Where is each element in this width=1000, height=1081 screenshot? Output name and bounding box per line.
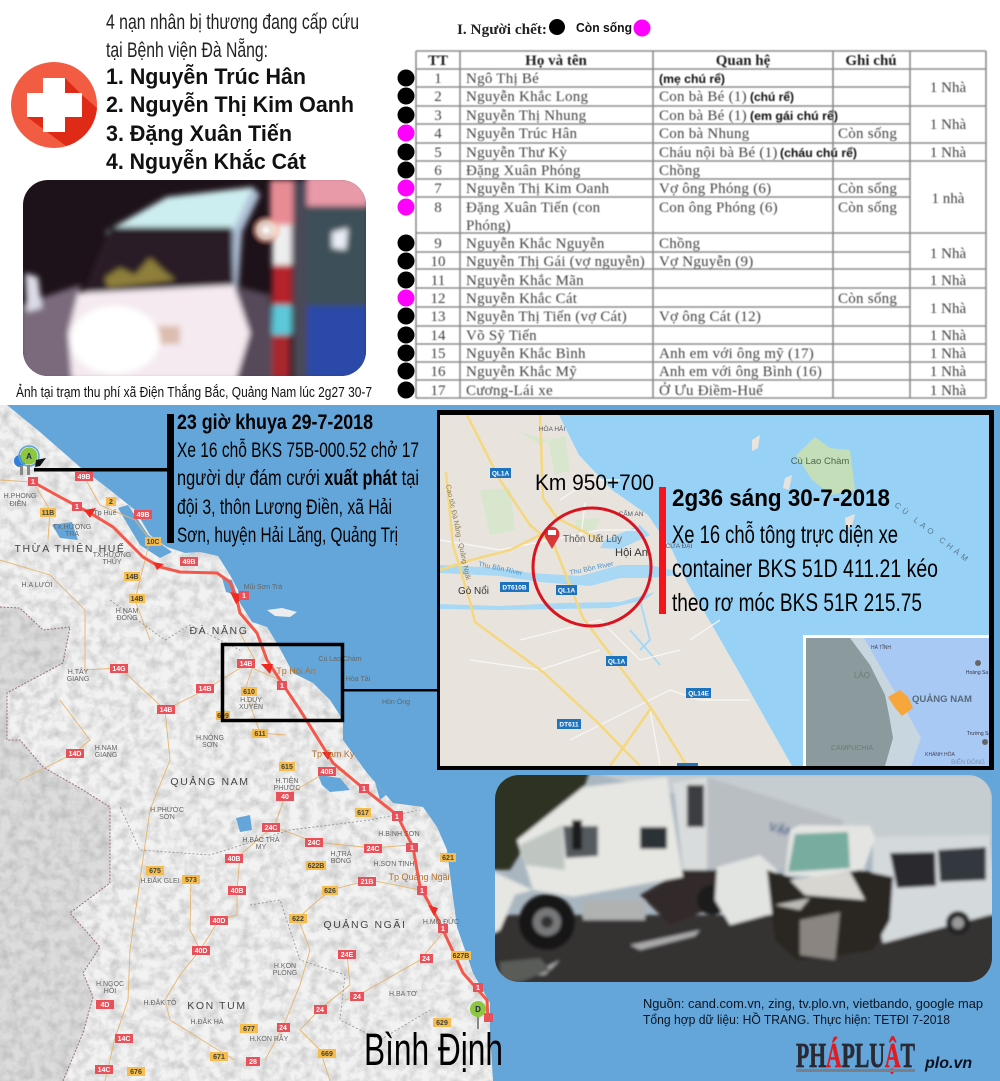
table: victims list: 11 (431, 273, 445, 289)
district labels: H.ĐĂK GLEI (140, 876, 180, 885)
legend: dead and alive (457, 19, 650, 38)
table: victims list: Nguyễn Thị Gái (vợ nguyễn) (466, 254, 645, 270)
route shield labels yellow: 573 (185, 877, 197, 884)
table: victims list: 1 Nhà (930, 273, 966, 289)
route shield labels red: 40D (195, 948, 207, 955)
table: victims list: 15 (430, 346, 446, 362)
route shield labels red: 1 (362, 786, 366, 793)
route shield labels red: 40B (231, 888, 243, 895)
table: victims list: Nguyễn Khắc Nguyễn (466, 236, 605, 252)
callout: departure (167, 411, 419, 547)
table: victims list: 7 (434, 181, 442, 197)
route shield labels red: 40 (281, 794, 289, 801)
district labels: Tp Tam Kỳ (312, 749, 355, 759)
callout: crash: 2g36 sáng 30-7-2018 (672, 485, 890, 512)
inset white roads (440, 480, 750, 765)
route shield labels red: 4D (101, 1002, 109, 1009)
route shield labels yellow: 610 (243, 689, 255, 696)
inset road shields: DT611 (559, 722, 579, 728)
caption: toll station photo: Ảnh tại trạm thu phí xã Điện Thắng Bắc, Quảng Nam lúc 2g27 30-7 (16, 384, 372, 401)
route shield labels yellow: 2 (109, 499, 113, 506)
district labels: HỒI (104, 985, 116, 995)
route shield labels yellow: 676 (130, 1069, 142, 1076)
route shield labels red: 24C (308, 840, 320, 847)
inset road shields: QL1A (492, 470, 509, 478)
route shield labels yellow: 675 (149, 868, 161, 875)
district labels: H.BÌNH SƠN (378, 829, 420, 838)
table: victims list: TT (428, 53, 448, 69)
inset place labels: Hội An (615, 547, 648, 559)
table: victims list: 1 Nhà (930, 328, 966, 344)
table: victims list: 5 (434, 145, 442, 161)
label: Binh Dinh: Bình Định (364, 1024, 503, 1075)
table: victims list: Vợ ông Cát (12) (659, 309, 761, 325)
table: victims list: Anh em với ông mỹ (17) (659, 346, 814, 362)
district labels: H.TIÊN (276, 776, 298, 785)
table: victims list: 13 (430, 309, 446, 325)
mini locator map: Hoàng Sa (966, 670, 988, 676)
inset place labels: Thu Bồn River (478, 559, 524, 577)
district labels: Cù Lao Chàm (318, 656, 362, 663)
logo: plo.vn: plo.vn (924, 1055, 972, 1072)
table: victims list: Chồng (659, 236, 701, 252)
icon: red cross (11, 62, 97, 148)
table: victims list: 1 (434, 71, 442, 87)
heading: injured victims: tại Bệnh viện Đà Nẵng: (106, 39, 268, 62)
table: victims list: 1 nhà (932, 191, 965, 207)
route shield labels red: 24 (353, 994, 361, 1001)
callout: departure: người dự đám cưới xuất phát tại (177, 467, 419, 490)
marker A: departure (14, 446, 46, 475)
photo: van at toll station (20, 176, 369, 380)
district labels: H.DUY (240, 697, 262, 704)
mini locator map: LÀO (854, 671, 870, 680)
district labels: H.A LƯỚI (21, 580, 53, 589)
route shield labels yellow: 14B (131, 596, 143, 603)
source credits: Nguồn: cand.com.vn, zing, tv.plo.vn, vietbando, google map (643, 996, 983, 1011)
route shield labels yellow: 671 (213, 1054, 225, 1061)
route shield labels yellow (42, 499, 469, 1076)
table: victims list: Nguyễn Thư Kỳ (466, 145, 567, 161)
table: victims list: 6 (434, 163, 442, 179)
table: victims list: Vợ Nguyễn (9) (659, 254, 754, 270)
route shield labels yellow: 629 (436, 1020, 448, 1027)
table: victims list: 16 (430, 364, 446, 380)
table: victims list: 1 Nhà (930, 145, 966, 161)
district labels: Hòn Ông (382, 697, 410, 706)
mini locator map: HÀ TĨNH (871, 644, 891, 651)
legend: dead and alive: Còn sống (576, 20, 632, 35)
district labels: H.NAM (116, 608, 138, 615)
table: victims list: Con ông Phóng (6) (659, 200, 778, 216)
inset map: crash site (437, 410, 994, 770)
route shield labels yellow: 10C (147, 539, 159, 546)
district labels: H.TÂY (68, 667, 89, 676)
inset place labels: CỬA ĐẠI (666, 541, 693, 550)
callout: crash: theo rơ móc BKS 51R 215.75 (672, 589, 922, 617)
table: victims list: Đặng Xuân Phóng (466, 163, 581, 179)
table: victims list: Vợ ông Phóng (6) (659, 181, 771, 197)
list of injured names: 4. Nguyễn Khắc Cát (106, 149, 306, 174)
route shield labels red: 1 (441, 926, 445, 933)
district labels: GIANG (95, 752, 117, 759)
district labels: H.KON RẪY (250, 1034, 289, 1043)
table: victims list: 2 (434, 89, 442, 105)
inset land (440, 415, 792, 766)
table: victims list: Nguyễn Khắc Cát (466, 291, 578, 307)
inset road shields: QL1A (558, 588, 575, 594)
district labels (4, 493, 459, 1043)
route shield labels red: 1 (395, 814, 399, 821)
cape and islands (267, 608, 297, 617)
mini locator map: Trường Sa (967, 731, 991, 737)
map: central Vietnam route (0, 405, 500, 1081)
water: lagoons and lakes (52, 505, 392, 832)
table: victims list: Nguyễn Khắc Mỹ (466, 364, 577, 380)
table: victims list: Còn sống (838, 126, 897, 142)
route shield labels red: 40B (321, 769, 333, 776)
table: victims list: Nguyễn Thị Tiến (vợ Cát) (466, 309, 627, 325)
table: victims list: Con bà Bé (1) (659, 89, 747, 105)
inset place labels: Cao tốc Đà Nẵng - Quảng Ngãi (444, 484, 473, 581)
route shield labels red: 24 (422, 956, 430, 963)
table: victims list: Đặng Xuân Tiến (con (466, 200, 601, 216)
inset place labels: Cù Lao Chàm (791, 456, 849, 467)
route shield labels red: 40D (213, 918, 225, 925)
district labels: Hòa Tài (346, 676, 371, 683)
district labels: H.NAM (95, 745, 117, 752)
table: victims list: 17 (430, 383, 446, 399)
district labels: H.ĐĂK HÀ (190, 1017, 224, 1026)
table: victims list: (em gái chú rể) (750, 111, 838, 123)
route shield labels yellow: 14B (126, 574, 138, 581)
district labels: H.MỘ ĐỨC (423, 917, 459, 926)
route shield labels red: 1 (75, 504, 79, 511)
table: victims list: 12 (430, 291, 446, 307)
locator box on map (222, 644, 342, 720)
callout: crash (659, 485, 938, 617)
route shield labels yellow: 627B (453, 953, 469, 960)
table: victims list: 4 (434, 126, 442, 142)
table: victims list: Nguyễn Khắc Bình (466, 346, 586, 362)
route shield labels yellow: 611 (254, 731, 266, 738)
route shield labels red: 28 (249, 1059, 257, 1066)
inset place labels: Thôn Uất Lũy (563, 533, 623, 545)
route shield labels red: 24C (265, 825, 277, 832)
table: victims list: 1 Nhà (930, 246, 966, 262)
table: victims list: Ghi chú (845, 53, 897, 69)
route shield labels yellow: 621 (442, 855, 454, 862)
district labels: BỒNG (331, 855, 351, 865)
mini locator map: CAMPUCHIA (831, 745, 873, 752)
route shield labels red: 49B (137, 512, 149, 519)
table: victims list: 9 (434, 236, 442, 252)
inset road shields (490, 468, 711, 768)
province labels: QUẢNG NAM (170, 775, 250, 788)
table: victims list: Nguyễn Trúc Hân (466, 126, 577, 142)
district labels: ĐÔNG (116, 613, 138, 622)
label: Km 950+700: Km 950+700 (535, 470, 654, 495)
district labels: Tp Quảng Ngãi (388, 872, 450, 882)
islands (796, 437, 855, 495)
route shield labels yellow: 617 (357, 810, 369, 817)
table: victims list: 14 (430, 328, 446, 344)
province labels: KON TUM (187, 1000, 247, 1012)
table: victims list: Con bà Nhung (659, 126, 750, 142)
route shields yellow (40, 497, 471, 1076)
route shield labels red: 40B (228, 856, 240, 863)
route shield labels yellow: 609 (217, 713, 229, 720)
table: victims list: Nguyễn Thị Nhung (466, 108, 587, 124)
province labels: ĐÀ NẴNG (189, 624, 249, 637)
district labels: ĐIỀN (10, 498, 26, 508)
table: victims list: Chồng (659, 163, 701, 179)
callout: departure: 23 giờ khuya 29-7-2018 (177, 411, 373, 434)
inset place labels: Gò Nổi (458, 585, 489, 597)
table: victims list: Còn sống (838, 291, 897, 307)
list of injured names: 2. Nguyễn Thị Kim Oanh (106, 92, 354, 117)
table: victims list: Cương-Lái xe (466, 383, 553, 399)
table: victims list: 1 Nhà (930, 117, 966, 133)
inset place labels: CẨM AN (619, 509, 644, 518)
route shield labels red: 49B (78, 474, 90, 481)
district labels: H.KON (274, 963, 296, 970)
heading: injured victims (106, 11, 359, 174)
district labels: H.ĐĂK TÔ (144, 998, 177, 1007)
mini locator map (803, 635, 991, 766)
table: victims list: 1 Nhà (930, 346, 966, 362)
inset road shields: QL14E (688, 690, 709, 698)
marker B: crash destination: D (475, 1005, 481, 1014)
route shield labels red: 14B (160, 707, 172, 714)
route shield labels red: 1 (476, 985, 480, 992)
borders (0, 607, 110, 1081)
legend: dead and alive: I. Người chết: (457, 22, 547, 38)
heading: injured victims: 4 nạn nhân bị thương đang cấp cứu (106, 11, 359, 34)
route shield labels yellow: 615 (281, 764, 293, 771)
district labels: PHƯỚC (274, 783, 300, 792)
route shield labels red: 24 (279, 1025, 287, 1032)
district labels: H.SƠN TỊNH (374, 861, 414, 868)
district labels: SƠN (159, 814, 175, 821)
connector: locator box to inset (344, 689, 438, 692)
route shield labels red: 1 (280, 683, 284, 690)
table: victims list: 8 (434, 200, 442, 216)
route shield labels yellow: 11B (42, 510, 54, 517)
table: victims list: 1 Nhà (930, 364, 966, 380)
route shield labels red: 1 (242, 593, 246, 600)
route shield labels red: 24C (367, 846, 379, 853)
table: victims list: Còn sống (838, 200, 897, 216)
logo: Phap Luat: PHÁPLUẬT (796, 1035, 915, 1075)
roads (0, 478, 445, 1081)
district labels: H.NGỌC (96, 981, 124, 988)
status dots beside table (398, 70, 414, 398)
route shield labels red: 24 (316, 1007, 324, 1014)
callout: departure: Sơn, huyện Hải Lăng, Quảng Trị (177, 524, 398, 547)
table: victims list: Con bà Bé (1) (659, 108, 747, 124)
route shield labels red: 14G (112, 666, 126, 673)
inset place labels: CÙ LAO CHÀM (893, 500, 972, 565)
connector: departure marker to callout (34, 468, 168, 472)
table: victims list: Anh em với ông Bình (16) (659, 364, 822, 380)
district labels: TX.HƯƠNG (53, 524, 91, 531)
district labels: H.BA TƠ (389, 991, 417, 998)
table: victims list: Nguyễn Thị Kim Oanh (466, 181, 609, 197)
table: victims list: 1 Nhà (930, 80, 966, 96)
district labels: XUYÊN (239, 702, 263, 711)
district labels: H.PHƯỚC (150, 805, 184, 814)
district labels: Tp Huế (94, 508, 117, 517)
district labels: H.PHONG (4, 493, 36, 500)
route shield labels red: 1 (410, 845, 414, 852)
route shields red (28, 472, 493, 1074)
district labels: PLÔNG (273, 968, 297, 977)
list of injured names: 1. Nguyễn Trúc Hân (106, 64, 306, 89)
district labels: SƠN (202, 742, 218, 749)
marker B: crash destination (470, 1001, 486, 1029)
main route: red line (33, 482, 488, 1020)
province labels (14, 542, 407, 1012)
route shield labels red: 14B (240, 661, 252, 668)
land base (0, 405, 500, 1081)
route shield labels yellow: 622 (292, 916, 304, 923)
table: victims list: Cháu nội bà Bé (1) (659, 145, 778, 161)
mini locator map: KHÁNH HÒA (925, 751, 956, 758)
table: victims list: 1 Nhà (930, 301, 966, 317)
district labels: Mũi Sơn Trà (244, 584, 282, 591)
district labels: H.TRÀ (330, 849, 352, 858)
district labels: TX.HƯƠNG (93, 552, 131, 559)
callout: departure: Xe 16 chỗ BKS 75B-000.52 chở 17 (177, 439, 419, 462)
district labels: H.NÔNG (196, 733, 224, 742)
province labels: QUẢNG NGÃI (323, 918, 407, 931)
table: victims list (416, 51, 986, 399)
route shield labels red: 14B (199, 686, 211, 693)
mini locator map: BIỂN ĐÔNG (951, 759, 985, 766)
source credits: Tổng hợp dữ liệu: HỒ TRANG. Thực hiện: TETĐI 7-2018 (643, 1012, 950, 1027)
sea background panel (0, 405, 1000, 1081)
route shield labels red: 21B (361, 879, 373, 886)
inset road shields: QL1A (608, 658, 625, 666)
route shield labels red (31, 474, 480, 1074)
mini locator map: QUẢNG NAM (912, 693, 972, 705)
inset place labels: HÒA HẢI (539, 424, 565, 433)
table: victims list: (chú rể) (750, 92, 794, 104)
table: victims list: (mẹ chú rể) (659, 74, 725, 86)
table: victims list: Họ và tên (525, 53, 587, 69)
route shield labels red: 14D (69, 751, 81, 758)
route shield labels yellow: 622B (308, 863, 324, 870)
table: victims list: Nguyễn Khắc Long (466, 89, 589, 105)
photo: wrecked truck and van (490, 770, 997, 987)
route shield labels red: 14C (98, 1067, 110, 1074)
photo: wrecked truck and van: VẬN TẢI HOA (767, 818, 847, 854)
table: victims list: Quan hệ (716, 53, 771, 69)
district labels: TRÀ (65, 529, 79, 538)
route shield labels yellow: 669 (321, 1051, 333, 1058)
district labels: Tp Hội An (276, 666, 316, 676)
table: victims list: Võ Sỹ Tiến (466, 328, 537, 344)
inset place labels: Thu Bồn River (569, 559, 615, 577)
source credits (643, 996, 983, 1027)
table: victims list: Ở Ưu Điềm-Huế (659, 382, 763, 399)
route shield labels red: 49B (183, 559, 195, 566)
table: victims list: Ngô Thị Bé (466, 71, 539, 87)
callout: departure: đội 3, thôn Lương Điền, xã Hải (177, 496, 392, 519)
table: victims list: Nguyễn Khắc Mãn (466, 273, 584, 289)
table: victims list: 10 (430, 254, 446, 270)
district labels: H.BẮC TRÀ (242, 835, 280, 844)
route shield labels red: 1 (420, 888, 424, 895)
district labels: THỦY (102, 557, 122, 566)
table: victims list: Còn sống (838, 181, 897, 197)
route shield labels yellow: 677 (243, 1026, 255, 1033)
red circle: crash area (533, 508, 651, 626)
inset rivers (440, 525, 680, 610)
inset yellow highways (440, 415, 687, 766)
inset place labels (444, 424, 972, 597)
list of injured names: 3. Đặng Xuân Tiến (106, 121, 292, 146)
marker A: departure: A (26, 452, 32, 461)
inset green patches (480, 432, 600, 535)
route shield labels yellow: 626 (324, 888, 336, 895)
district labels: GIANG (67, 676, 89, 683)
inset road shields: DT610B (502, 584, 527, 592)
route shield labels red: 1 (31, 479, 35, 486)
route shield labels red: 14C (118, 1036, 130, 1043)
pin: crash location (544, 527, 560, 549)
province labels: THỪA THIÊN HUẾ (14, 542, 126, 555)
table: victims list: 1 Nhà (930, 383, 966, 399)
district labels: MY (256, 844, 267, 851)
route shield labels red: 24E (341, 952, 354, 959)
list of injured names (106, 64, 354, 174)
table: victims list: Phóng) (466, 218, 511, 234)
table: victims list: 3 (434, 108, 442, 124)
callout: crash: Xe 16 chỗ tông trực diện xe (672, 520, 898, 549)
table: victims list: (cháu chú rể) (780, 148, 857, 160)
